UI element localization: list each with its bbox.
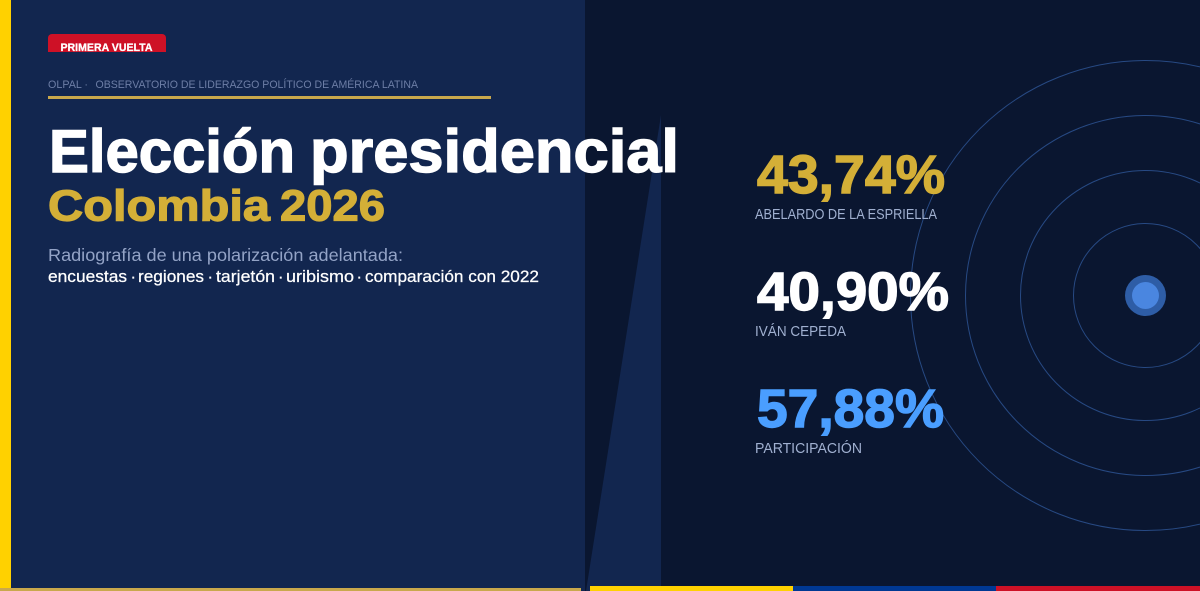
gold rule (48, 96, 491, 99)
badge: primera vuelta: PRIMERA VUELTA (60, 42, 153, 54)
icon: radar centre dot (1125, 275, 1166, 316)
description (48, 245, 539, 286)
stat: Iván Cepeda: 40,90% (757, 262, 949, 322)
description: uribismo (286, 268, 354, 286)
organisation line: OLPAL · (48, 79, 88, 91)
subtitle: 2026 (280, 182, 385, 230)
flag stripe (590, 586, 1200, 591)
description: encuestas (48, 268, 127, 286)
description: · (278, 268, 284, 286)
title (49, 118, 679, 185)
description: · (208, 268, 213, 286)
left accent bar (0, 0, 11, 591)
stat: Abelardo de la Espriella: 43,74% (757, 145, 945, 205)
decorative triangle (586, 115, 661, 591)
panel: left background (0, 0, 585, 591)
title: Elección (49, 118, 295, 185)
description: Radiografía de una polarización adelantada: (48, 245, 403, 265)
description: regiones (138, 268, 204, 286)
gold bottom rule (0, 588, 581, 591)
badge: primera vuelta (48, 34, 166, 54)
subtitle (48, 182, 385, 230)
subtitle: Colombia (48, 182, 271, 230)
concentric radar rings (910, 60, 1200, 530)
stat: Abelardo de la Espriella: ABELARDO DE LA ESPRIELLA (755, 207, 937, 223)
stat: participación: PARTICIPACIÓN (755, 440, 862, 457)
stat: participación: 57,88% (757, 379, 944, 439)
description: · (130, 268, 136, 286)
description: comparación con 2022 (365, 268, 539, 286)
title: presidencial (310, 118, 679, 185)
organisation line: OBSERVATORIO DE LIDERAZGO POLÍTICO DE AMÉRICA LATINA (96, 78, 419, 91)
description: · (356, 268, 362, 286)
description: tarjetón (216, 268, 275, 286)
stat: Iván Cepeda: IVÁN CEPEDA (755, 323, 846, 340)
